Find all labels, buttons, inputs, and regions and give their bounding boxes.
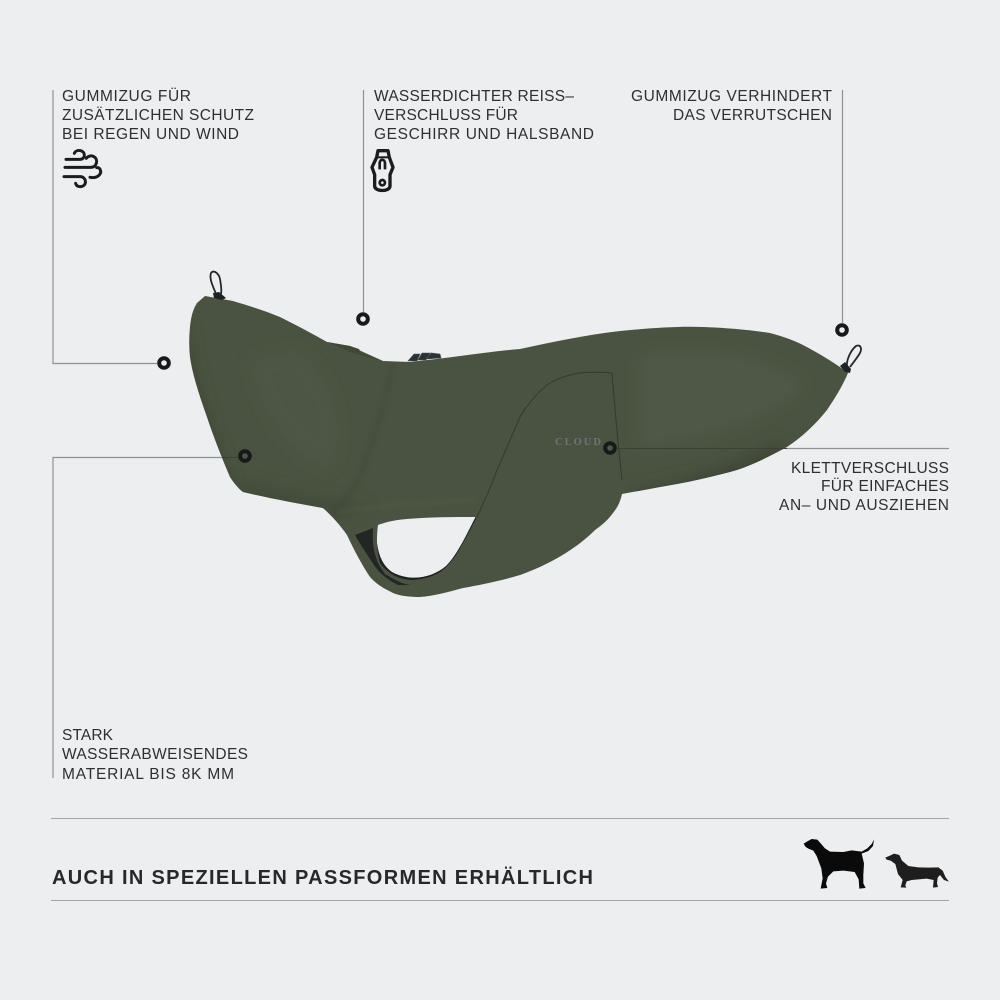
side flap [443,372,622,575]
footer rule top [51,818,949,819]
leader line [362,90,364,312]
tail toggle [840,346,861,373]
text block: BEI REGEN UND WIND [62,126,239,143]
text block: WASSERDICHTER REISS– [374,88,574,105]
text block [62,87,254,143]
marker [358,314,368,324]
icon: zipper [372,151,393,190]
leader line [53,458,222,778]
icon: large dog [804,839,874,889]
collar strap [327,342,383,361]
zipper teeth [408,353,441,361]
text block: WASSERABWEISENDES [62,746,248,763]
text block: GESCHIRR UND HALSBAND [374,126,594,143]
text block: ZUSÄTZLICHEN SCHUTZ [62,107,254,124]
callout: elastic hood [53,87,254,368]
marker [837,325,847,335]
text block: MATERIAL BIS 8K MM [62,766,234,783]
text block: VERSCHLUSS FÜR [374,106,518,124]
text block: GUMMIZUG VERHINDERT [631,88,833,105]
lower body hem [337,500,476,512]
hood toggle [210,272,226,300]
marker [605,443,615,453]
text block: GUMMIZUG FÜR [62,87,191,105]
marker [240,451,250,461]
text block: AN– UND AUSZIEHEN [779,497,949,514]
callout: waterproof zipper [358,88,594,324]
text block: DAS VERRUTSCHEN [673,107,832,124]
callout: anti-slip elastic [631,88,847,335]
coat inner lining strip [355,528,413,585]
brand label: CLOUD [555,437,601,448]
text block: STARK [62,727,114,744]
text block [62,727,248,783]
footer rule bottom [51,900,949,901]
leader line [53,90,157,364]
neck seam [335,365,392,514]
leader line over coat [222,456,238,458]
leader line outside coat [787,448,949,450]
text block: KLETTVERSCHLUSS [791,460,949,477]
dog coat product image [175,272,861,597]
coat body [189,296,848,597]
flap edge [477,372,622,517]
leader line [617,448,787,450]
callout: velcro closure [605,443,949,514]
marker [159,358,169,368]
coat soft shading [175,300,805,520]
icon: dachshund [885,854,949,888]
text block [631,88,833,124]
leader line [842,90,844,323]
footer heading: AUCH IN SPEZIELLEN PASSFORMEN ERHÄLTLICH [52,866,593,889]
text block [374,88,594,143]
text block: FÜR EINFACHES [821,477,949,495]
callout: water repellent material [53,451,250,783]
coat lining [352,516,490,592]
icon: wind [64,150,101,187]
text block [779,460,949,514]
